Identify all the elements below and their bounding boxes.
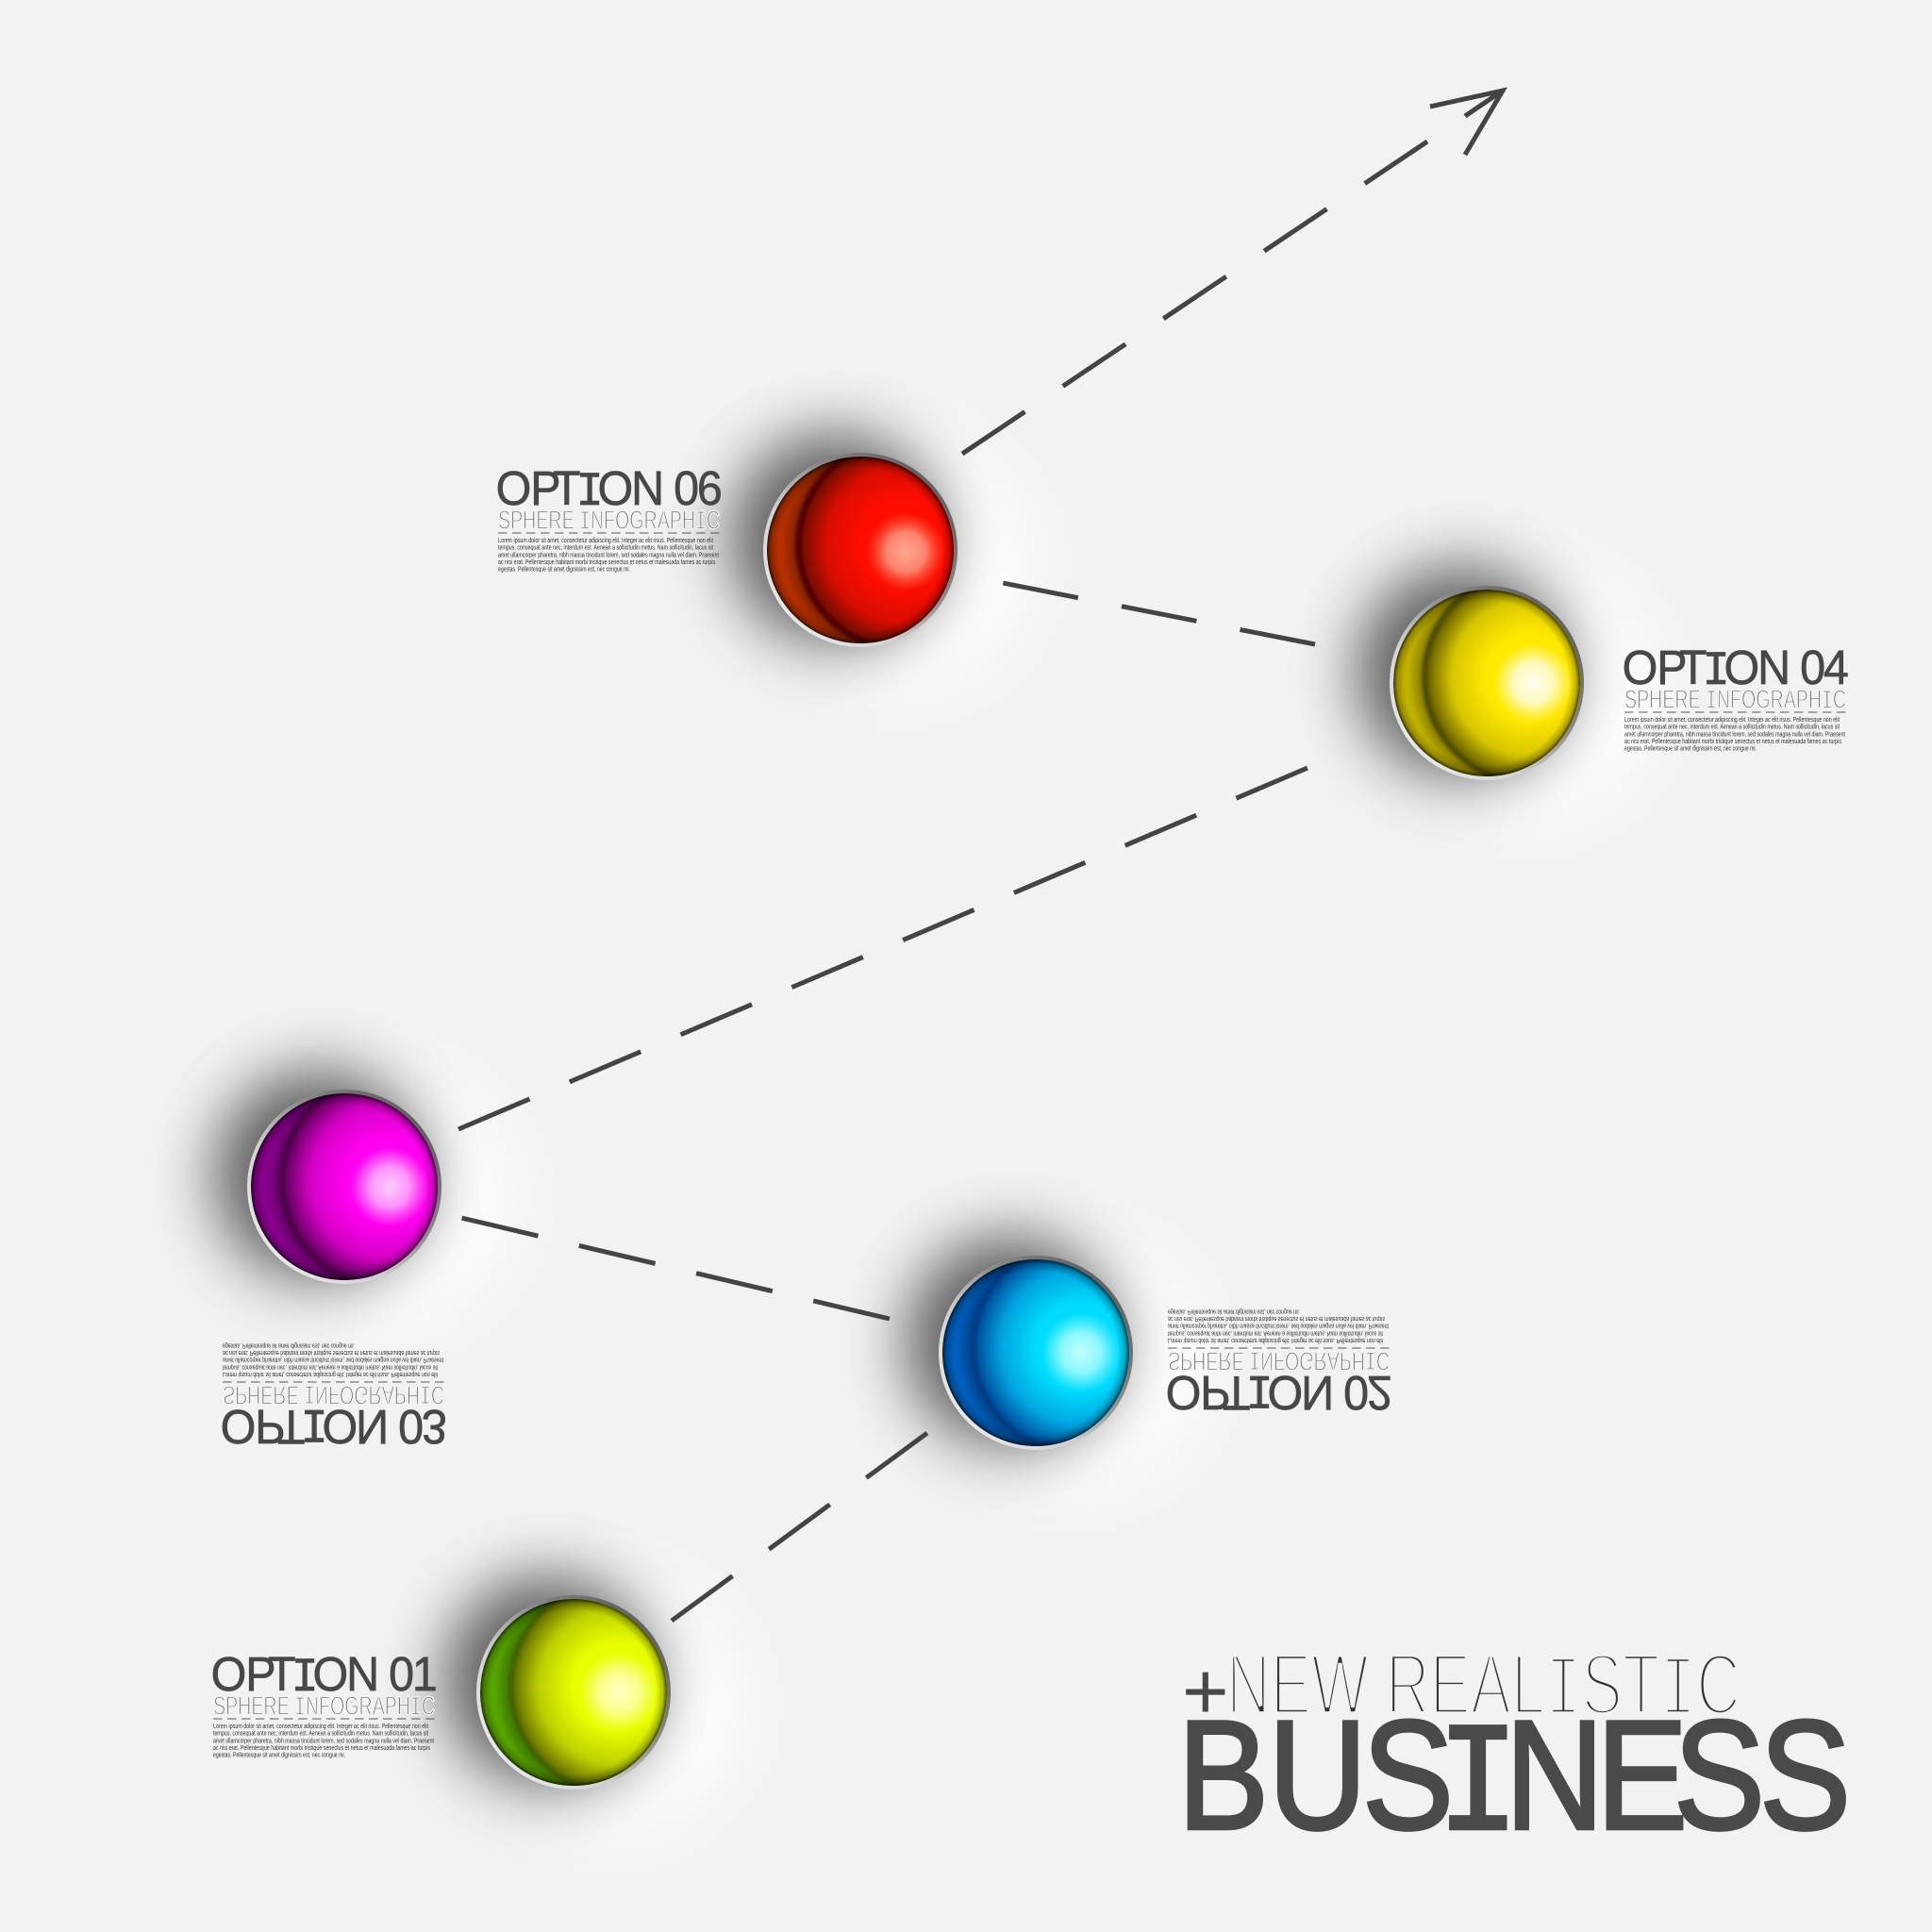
sphere: option 06 red xyxy=(719,427,1027,689)
divider xyxy=(498,532,722,534)
heading: I xyxy=(1246,1362,1274,1416)
body text: tempus, consequat ante nec, interdum est. Aenean a sollicitudin metus. Nam sollicitudin, lacus sit xyxy=(1624,724,1840,731)
heading: I xyxy=(576,465,604,519)
sphere: option 01 green xyxy=(432,1570,741,1831)
glow and shadow xyxy=(203,1064,511,1325)
dashed segment: option 03 to 04 xyxy=(458,768,1307,1129)
body text: Lorem ipsum dolor sit amet, consectetur adipiscing elit. Integer ac elit risus. Pellentesque non elit xyxy=(1624,717,1840,724)
title line: business: NESS xyxy=(1505,1688,1851,1862)
body text: Lorem ipsum dolor sit amet, consectetur adipiscing elit. Integer ac elit risus. Pellentesque non elit xyxy=(498,538,713,544)
heading: OPT xyxy=(496,461,581,515)
body text: amet ullamcorper pharetra, nibh massa tincidunt lorem, sed sodales magna nulla vel diam. Praesent xyxy=(213,1738,434,1744)
dashed arrow path xyxy=(458,91,1503,1621)
coloured ball xyxy=(942,1259,1129,1446)
body text: ac nisi erat. Pellentesque habitant morbi tristique senectus et netus et malesuada fames ac turpis xyxy=(223,1349,440,1356)
heading: ON 02 xyxy=(1267,1366,1392,1420)
heading: OPT xyxy=(221,1400,306,1454)
sphere: option 02 cyan xyxy=(894,1230,1203,1491)
heading: I xyxy=(1703,644,1730,698)
metal ring xyxy=(763,453,958,647)
metal ring xyxy=(939,1256,1133,1450)
text block: option 01 xyxy=(211,1647,438,1759)
glow and shadow xyxy=(1345,560,1654,822)
body text: amet ullamcorper pharetra, nibh massa tincidunt lorem, sed sodales magna nulla vel diam. Praesent xyxy=(223,1357,443,1363)
body text xyxy=(223,1341,443,1377)
dashed segment: option 06 to arrow xyxy=(962,142,1427,454)
body text: Lorem ipsum dolor sit amet, consectetur adipiscing elit. Integer ac elit risus. Pellentesque non elit xyxy=(223,1371,438,1377)
body text: egestas. Pellentesque sit amet dignissim est, nec congue mi. xyxy=(1168,1307,1300,1314)
glow and shadow xyxy=(894,1230,1203,1491)
metal ring xyxy=(1390,586,1584,780)
body text: tempus, consequat ante nec, interdum est. Aenean a sollicitudin metus. Nam sollicitudin, lacus sit xyxy=(498,545,713,552)
heading: ON 06 xyxy=(597,461,723,515)
arrow head xyxy=(1430,91,1503,155)
heading: ON 01 xyxy=(312,1647,438,1701)
body text xyxy=(1624,717,1845,753)
heading: OPT xyxy=(1166,1366,1251,1420)
coloured ball xyxy=(251,1093,438,1280)
body text: amet ullamcorper pharetra, nibh massa tincidunt lorem, sed sodales magna nulla vel diam. Praesent xyxy=(498,552,719,558)
subheading: SPHERE INFOGRAPHIC xyxy=(1168,1343,1390,1375)
plus sign: + xyxy=(1182,1647,1229,1737)
body text: ac nisi erat. Pellentesque habitant morbi tristique senectus et netus et malesuada fames ac turpis xyxy=(213,1745,430,1752)
heading: ON 03 xyxy=(322,1400,447,1454)
dashed segment: option 01 to 02 xyxy=(672,1433,927,1621)
heading: I xyxy=(301,1396,328,1450)
body text: tempus, consequat ante nec, interdum est. Aenean a sollicitudin metus. Nam sollicitudin, lacus sit xyxy=(1168,1329,1383,1336)
divider xyxy=(1624,711,1848,713)
divider xyxy=(213,1718,437,1720)
text block: option 02 (flipped) xyxy=(1166,1307,1392,1420)
body text: amet ullamcorper pharetra, nibh massa tincidunt lorem, sed sodales magna nulla vel diam. Praesent xyxy=(1168,1323,1389,1329)
glow and shadow xyxy=(719,427,1027,689)
dashed segment: option 04 to 06 xyxy=(1003,583,1315,644)
body text: egestas. Pellentesque sit amet dignissim est, nec congue mi. xyxy=(223,1341,355,1348)
coloured ball xyxy=(480,1599,667,1786)
coloured ball xyxy=(767,457,954,643)
body text: tempus, consequat ante nec, interdum est. Aenean a sollicitudin metus. Nam sollicitudin, lacus sit xyxy=(213,1731,428,1738)
infographic canvas xyxy=(170,87,1848,1832)
body text: Lorem ipsum dolor sit amet, consectetur adipiscing elit. Integer ac elit risus. Pellentesque non elit xyxy=(1168,1337,1383,1343)
body text: ac nisi erat. Pellentesque habitant morbi tristique senectus et netus et malesuada fames ac turpis xyxy=(498,559,715,566)
body text: egestas. Pellentesque sit amet dignissim est, nec congue mi. xyxy=(498,567,630,574)
heading: OPT xyxy=(211,1647,296,1701)
body text: egestas. Pellentesque sit amet dignissim est, nec congue mi. xyxy=(1624,746,1757,753)
subheading: SPHERE INFOGRAPHIC xyxy=(223,1377,444,1409)
coloured ball xyxy=(1393,590,1580,776)
body text xyxy=(1168,1307,1389,1343)
dashed segment: option 02 to 03 xyxy=(461,1218,890,1319)
title line: business: BUS xyxy=(1177,1688,1454,1862)
metal ring xyxy=(476,1595,671,1790)
sphere: option 04 yellow xyxy=(1345,560,1654,822)
body text: Lorem ipsum dolor sit amet, consectetur adipiscing elit. Integer ac elit risus. Pellentesque non elit xyxy=(213,1724,428,1730)
title line: new realistic: NEW REALISTIC xyxy=(1226,1637,1740,1740)
text block: option 03 (flipped) xyxy=(221,1341,447,1454)
body text: tempus, consequat ante nec, interdum est. Aenean a sollicitudin metus. Nam sollicitudin, lacus sit xyxy=(223,1363,438,1370)
subheading: SPHERE INFOGRAPHIC xyxy=(1624,685,1846,717)
text block: option 06 xyxy=(496,461,723,574)
body text: ac nisi erat. Pellentesque habitant morbi tristique senectus et netus et malesuada fames ac turpis xyxy=(1168,1315,1385,1322)
sphere: option 03 magenta xyxy=(203,1064,511,1325)
body text: ac nisi erat. Pellentesque habitant morbi tristique senectus et netus et malesuada fames ac turpis xyxy=(1624,739,1841,745)
title: new realistic business xyxy=(1177,1637,1851,1875)
heading: ON 04 xyxy=(1724,641,1849,694)
divider xyxy=(1168,1347,1391,1349)
subheading: SPHERE INFOGRAPHIC xyxy=(213,1691,435,1724)
glow and shadow xyxy=(432,1570,741,1831)
metal ring xyxy=(247,1090,441,1284)
title line: business: I xyxy=(1437,1700,1519,1875)
body text: amet ullamcorper pharetra, nibh massa tincidunt lorem, sed sodales magna nulla vel diam. Praesent xyxy=(1624,731,1845,738)
divider xyxy=(223,1381,446,1383)
text block: option 04 xyxy=(1623,641,1849,753)
heading: I xyxy=(291,1651,319,1705)
subheading: SPHERE INFOGRAPHIC xyxy=(498,506,720,538)
body text xyxy=(498,538,719,574)
body text: egestas. Pellentesque sit amet dignissim est, nec congue mi. xyxy=(213,1753,345,1759)
heading: OPT xyxy=(1623,641,1707,694)
body text xyxy=(213,1724,434,1759)
